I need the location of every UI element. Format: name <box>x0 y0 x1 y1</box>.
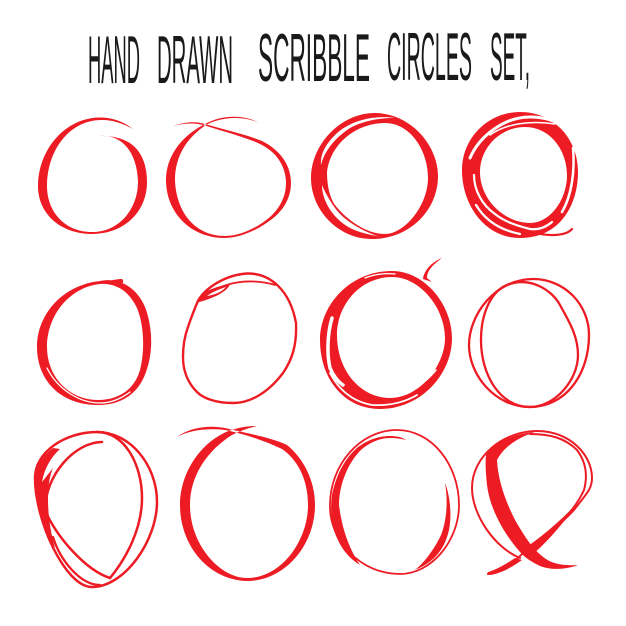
circle 3: double loop with heavy right side <box>311 113 438 239</box>
circle 9: elongated triple loop <box>35 432 157 587</box>
circle 10: crossed stroke with heavy left side <box>177 426 315 581</box>
circle 5: heavy stroke with overlap at top <box>37 279 151 405</box>
circle 6: thin loop with small eye at top <box>183 273 296 403</box>
circle 11: thin overlapping open loop <box>330 430 459 574</box>
circle 7: heavy scribble with upper-right flick <box>320 258 452 409</box>
title: DRAWN <box>157 22 233 98</box>
circle 4: multi-loop scribble with tail <box>462 112 578 238</box>
title: SCRIBBLE <box>258 20 370 96</box>
circle 2: crossed single stroke <box>166 117 291 238</box>
circle 1: open single stroke <box>38 118 147 234</box>
circle 12: ribbon loop with crossing tails <box>472 431 592 575</box>
title: HAND <box>88 22 140 98</box>
circle 8: thin double loop <box>469 279 589 407</box>
title <box>88 19 530 98</box>
